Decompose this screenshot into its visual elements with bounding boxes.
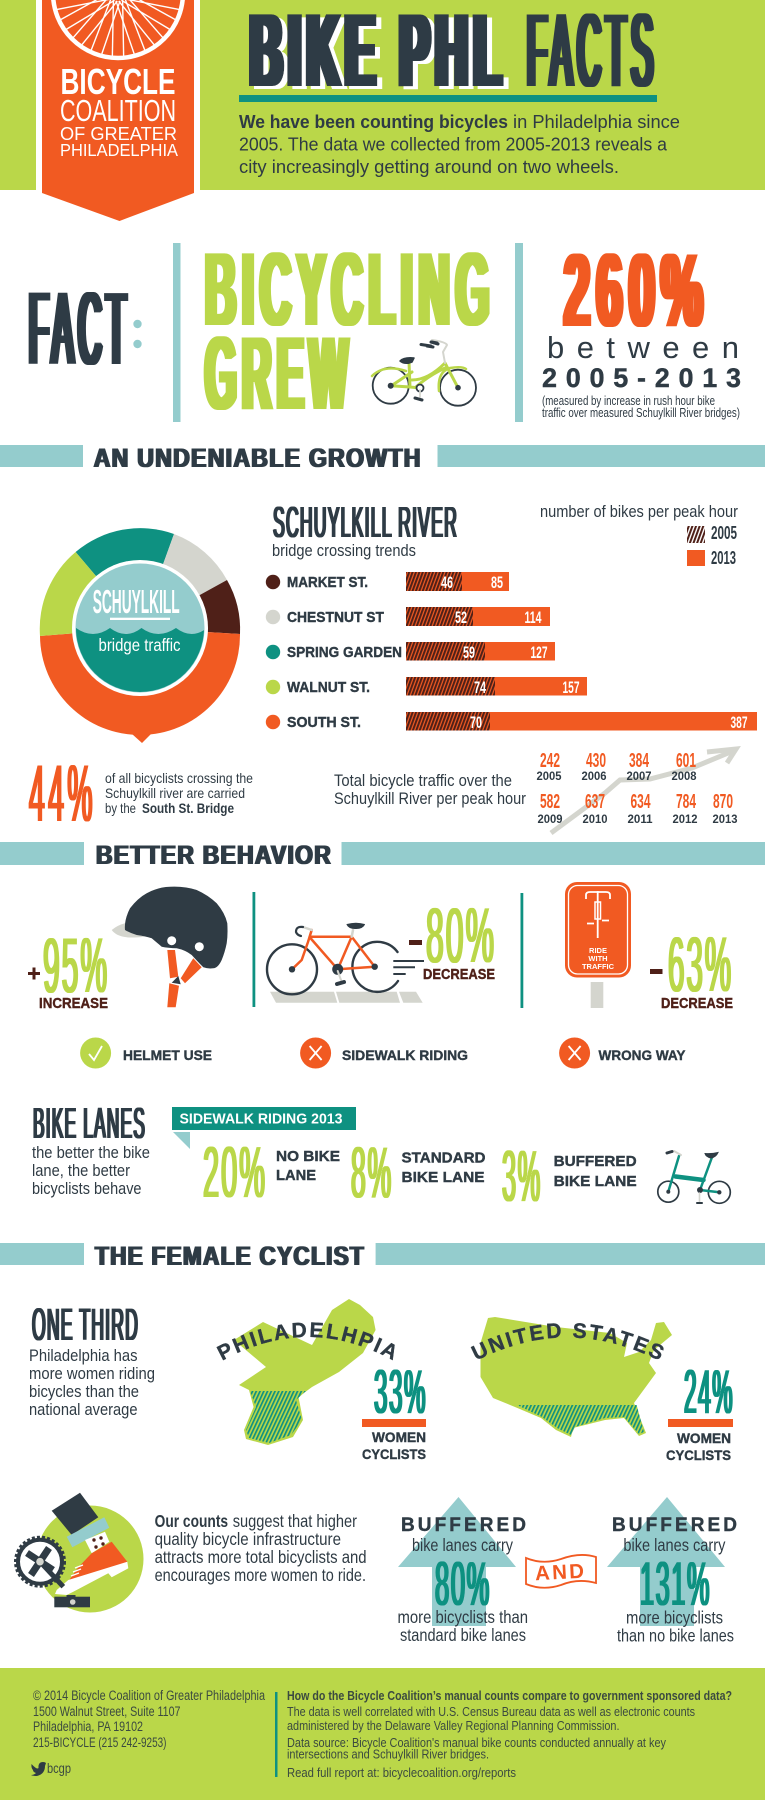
text: 33% xyxy=(374,1358,427,1427)
icon: check helmet use xyxy=(80,1038,212,1068)
yearly totals: 2007 xyxy=(626,771,652,783)
stat: no bike lane: NO BIKE xyxy=(276,1148,340,1165)
row: South St. xyxy=(266,712,757,732)
row: Spring Garden: 59 xyxy=(463,643,475,662)
stat: standard bike lane: BIKE LANE xyxy=(402,1169,484,1186)
icon: cross wrong way: WRONG WAY xyxy=(598,1047,686,1063)
stat: 44 percent south st bridge: by the xyxy=(105,800,136,816)
legend xyxy=(540,503,738,568)
stat arrow: 131 percent more bicyclists: bike lanes carry xyxy=(623,1535,726,1555)
one third text block: Philadelphia has xyxy=(29,1346,138,1365)
methodology note: intersections and Schuylkill River bridges. xyxy=(287,1746,489,1762)
section heading: the female cyclist xyxy=(0,1241,765,1271)
row: Market St.: 46 xyxy=(441,573,453,592)
yearly totals: 582 xyxy=(540,791,560,813)
row: Chestnut St xyxy=(266,607,550,627)
icon: cross sidewalk riding: SIDEWALK RIDING xyxy=(342,1047,468,1063)
stat: united states 24 percent women cyclists xyxy=(666,1358,734,1463)
stat: no bike lane: 20% xyxy=(203,1133,267,1213)
yearly totals: 242 xyxy=(540,750,560,772)
methodology note: Read full report at: bicyclecoalition.org/reports xyxy=(287,1765,516,1780)
intro paragraph xyxy=(239,111,680,177)
panel: fact bicycling grew: FACT xyxy=(29,271,131,386)
stat: 63 percent decrease xyxy=(650,920,733,1012)
stat: 44 percent south st bridge: 44% xyxy=(29,749,96,839)
stat: buffered bike lane: BUFFERED xyxy=(554,1153,637,1170)
icon: twitter bird xyxy=(31,1762,46,1776)
one third text block: bicycles than the xyxy=(29,1382,139,1401)
stat: united states 24 percent women cyclists: WOMEN xyxy=(677,1430,731,1446)
row: Walnut St.: WALNUT ST. xyxy=(287,680,370,696)
stat arrow: 131 percent more bicyclists xyxy=(607,1497,737,1646)
sidewalk slabs xyxy=(270,992,423,1003)
section heading: an undeniable growth xyxy=(0,443,765,473)
stat: 260 percent xyxy=(542,233,741,420)
yearly totals: 2009 xyxy=(538,814,562,826)
panel: sidewalk riding xyxy=(267,891,496,1003)
section heading: better behavior xyxy=(0,840,765,870)
icon: pedalling shoe and chainring xyxy=(16,1493,144,1612)
bike lanes intro: the better the bike xyxy=(32,1143,150,1162)
ribbon: sidewalk riding 2013: SIDEWALK RIDING 2013 xyxy=(180,1112,342,1128)
stat: 95 percent increase: INCREASE xyxy=(39,996,108,1012)
yearly totals: 637 xyxy=(585,791,605,813)
bike lanes intro xyxy=(32,1099,150,1198)
one third text block xyxy=(29,1299,155,1419)
stat arrow: 80 percent more bicyclists: 80% xyxy=(435,1550,491,1619)
stat arrow: 80 percent more bicyclists xyxy=(398,1497,528,1645)
stat: philadelphia 33 percent women cyclists: CYCLISTS xyxy=(362,1446,426,1462)
stat: buffered bike lane: 3% xyxy=(502,1137,542,1217)
one third text block: more women riding xyxy=(29,1364,155,1383)
intro paragraph: 2005. The data we collected from 2005-2013 reveals a xyxy=(239,134,668,154)
bar chart: bridge crossings 2005 vs 2013 xyxy=(266,572,757,732)
yearly totals: 384 xyxy=(629,750,650,772)
donut centre label: bridge traffic xyxy=(98,635,181,655)
stat arrow: 80 percent more bicyclists: BUFFERED xyxy=(401,1515,526,1536)
stat: 260 percent: (measured by increase in rush hour bike xyxy=(542,394,715,408)
yearly totals: 2013 xyxy=(712,814,738,826)
arrow: rising trend xyxy=(551,749,736,833)
row: Chestnut St: CHESTNUT ST xyxy=(287,610,384,626)
panel: helmet use xyxy=(28,887,228,1012)
map: united states xyxy=(470,1317,672,1437)
text: SCHUYLKILL RIVER xyxy=(273,498,458,547)
icon: check helmet use: HELMET USE xyxy=(123,1047,212,1063)
stat: 44 percent south st bridge: of all bicyclists crossing the xyxy=(105,770,253,786)
section heading: better behavior: BETTER BEHAVIOR xyxy=(96,840,332,870)
yearly totals xyxy=(536,750,738,826)
section heading: an undeniable growth: AN UNDENIABLE GROWTH xyxy=(94,443,422,473)
panel: bike lanes: BIKE LANES xyxy=(33,1099,146,1148)
row: Chestnut St: 114 xyxy=(524,608,542,627)
stat: 44 percent south st bridge: South St. Bridge xyxy=(142,800,234,816)
row: Spring Garden: SPRING GARDEN xyxy=(287,645,402,661)
yearly totals: 601 xyxy=(676,750,696,772)
bike lanes intro: bicyclists behave xyxy=(32,1179,142,1198)
stat arrow: 131 percent more bicyclists: than no bike lanes xyxy=(617,1626,734,1646)
yearly totals: 2005 xyxy=(536,771,562,783)
headline: bicycling grew: GREW xyxy=(205,316,353,432)
ribbon: and xyxy=(526,1555,596,1588)
row: Walnut St.: 74 xyxy=(474,678,486,697)
intro paragraph: city increasingly getting around on two wheels. xyxy=(239,156,619,177)
map: philadelphia: PHILADELHPIA xyxy=(216,1322,395,1360)
paragraph: our counts xyxy=(155,1511,367,1585)
logo wordmark: PHILADELPHIA xyxy=(60,140,178,160)
stat: 80 percent decrease xyxy=(409,891,496,983)
panel: wrong way riding xyxy=(565,882,733,1012)
methodology note: The data is well correlated with U.S. Census Bureau data as well as electronic counts xyxy=(287,1704,695,1719)
paragraph: our counts: attracts more total bicyclists and xyxy=(155,1547,367,1567)
contact details: Philadelphia, PA 19102 xyxy=(33,1719,143,1734)
behaviour labels row xyxy=(80,1038,686,1068)
panel: footer xyxy=(0,1668,765,1800)
stat arrow: 131 percent more bicyclists: BUFFERED xyxy=(612,1515,737,1536)
paragraph: our counts: Our counts xyxy=(155,1511,228,1531)
icon: teal folding bicycle xyxy=(658,1151,730,1203)
logo banner: Bicycle Coalition of Greater Philadelphia xyxy=(42,0,194,221)
map: united states: UNITED STATES xyxy=(470,1323,664,1360)
logo wordmark: OF GREATER xyxy=(60,124,177,144)
yearly totals: 634 xyxy=(630,791,651,813)
stat: buffered bike lane: BIKE LANE xyxy=(554,1173,637,1190)
stat: 260 percent: between xyxy=(547,330,739,365)
map: philadelphia xyxy=(216,1299,395,1445)
contact details: 1500 Walnut Street, Suite 1107 xyxy=(33,1704,180,1719)
stat: philadelphia 33 percent women cyclists xyxy=(362,1358,427,1462)
yearly totals: 2006 xyxy=(582,771,606,783)
bike lanes intro: lane, the better xyxy=(32,1161,130,1180)
icon: green cruiser bicycle xyxy=(372,340,476,406)
logo wordmark: COALITION xyxy=(60,93,176,128)
stat arrow: 80 percent more bicyclists: bike lanes carry xyxy=(412,1535,513,1555)
yearly totals: 870 xyxy=(713,791,733,813)
icon: helmet xyxy=(112,887,228,1007)
stat: united states 24 percent women cyclists: CYCLISTS xyxy=(666,1447,731,1463)
row: Walnut St.: 157 xyxy=(562,678,580,697)
row: South St.: 387 xyxy=(730,713,748,732)
headline: bicycling grew xyxy=(205,232,495,432)
logo wordmark: BICYCLE xyxy=(60,61,176,102)
icon: ride with traffic sign: TRAFFIC xyxy=(582,962,615,971)
contact details: © 2014 Bicycle Coalition of Greater Philadelphia xyxy=(33,1688,265,1703)
stat: standard bike lane: STANDARD xyxy=(402,1150,486,1166)
legend: number of bikes per peak hour xyxy=(540,503,738,521)
paragraph: our counts: suggest that higher xyxy=(233,1511,357,1531)
text: ONE THIRD xyxy=(32,1299,139,1350)
stat: 80 percent decrease: DECREASE xyxy=(423,967,495,983)
contact details xyxy=(31,1688,265,1776)
icon: ride with traffic sign xyxy=(565,882,631,1008)
icon: ride with traffic sign: WITH xyxy=(588,954,608,963)
yearly totals: 2012 xyxy=(672,814,698,826)
paragraph: our counts: quality bicycle infrastructure xyxy=(155,1529,341,1549)
yearly totals: 430 xyxy=(586,750,606,772)
ribbon: and: AND xyxy=(534,1560,585,1585)
row: South St.: SOUTH ST. xyxy=(287,715,361,731)
intro paragraph: We have been counting bicycles xyxy=(239,111,508,132)
one third text block: national average xyxy=(29,1400,138,1419)
speed lines xyxy=(393,961,424,974)
row: Spring Garden: 127 xyxy=(530,643,548,662)
panel: helmet use: 95% xyxy=(43,921,109,1009)
methodology note: administered by the Delaware Valley Regional Planning Commission. xyxy=(287,1718,620,1733)
row: Market St.: MARKET ST. xyxy=(287,575,368,591)
yearly totals: 2011 xyxy=(628,814,653,826)
stat: 63 percent decrease: DECREASE xyxy=(661,996,733,1012)
stat: philadelphia 33 percent women cyclists: WOMEN xyxy=(372,1429,426,1445)
stat arrow: 80 percent more bicyclists: standard bike lanes xyxy=(400,1625,526,1645)
row: Walnut St. xyxy=(266,677,587,697)
icon: cross sidewalk riding xyxy=(300,1038,468,1068)
total bicycle traffic trend: Schuylkill River per peak hour xyxy=(334,789,526,808)
yearly totals: 784 xyxy=(676,791,697,813)
legend: 2005 xyxy=(711,523,737,543)
stat: 260 percent: 2005-2013 xyxy=(542,363,741,393)
chart heading: schuylkill river xyxy=(272,498,458,560)
legend: 2013 xyxy=(711,548,736,568)
stat: 95 percent increase xyxy=(28,921,109,1012)
donut centre label xyxy=(93,583,181,655)
yearly totals: 2010 xyxy=(582,814,608,826)
methodology note xyxy=(287,1688,732,1780)
contact details: bcgp xyxy=(47,1761,71,1776)
intro paragraph: in Philadelphia since xyxy=(513,111,680,132)
ribbon: sidewalk riding 2013 xyxy=(172,1107,356,1149)
chart: schuylkill bridge traffic donut xyxy=(40,528,240,743)
row: Market St.: 85 xyxy=(491,573,503,592)
FACT heading xyxy=(29,271,142,386)
chart: schuylkill bridge traffic donut: SCHUYLKILL xyxy=(93,583,180,620)
panel: fact bicycling grew xyxy=(29,232,741,432)
stat: 44 percent south st bridge: Schuylkill river are carried xyxy=(105,785,245,801)
panel: bike lanes xyxy=(32,1099,730,1217)
total bicycle traffic trend xyxy=(334,749,738,833)
contact details: 215-BICYCLE (215 242-9253) xyxy=(33,1735,166,1750)
row: South St.: 70 xyxy=(470,713,482,732)
icon: orange road bicycle xyxy=(267,923,398,994)
stat arrow: 80 percent more bicyclists: more bicyclists than xyxy=(398,1607,528,1627)
stat arrow: 131 percent more bicyclists: more bicyclists xyxy=(626,1608,723,1628)
chart heading: schuylkill river: bridge crossing trends xyxy=(272,541,416,560)
row: Spring Garden xyxy=(266,642,555,662)
total bicycle traffic trend: Total bicycle traffic over the xyxy=(334,771,512,790)
yearly totals: 2008 xyxy=(672,771,697,783)
paragraph: our counts: encourages more women to ride. xyxy=(155,1565,366,1585)
panel: page header xyxy=(0,0,765,221)
row: Market St. xyxy=(266,572,509,592)
icon: bicycle wheel xyxy=(53,0,183,58)
text: 80% xyxy=(426,891,496,979)
stat: no bike lane: LANE xyxy=(276,1167,316,1184)
section heading: the female cyclist: THE FEMALE CYCLIST xyxy=(95,1241,365,1271)
methodology note: Data source: Bicycle Coalition's manual bike counts conducted annually at key xyxy=(287,1735,666,1750)
icon: cross wrong way xyxy=(559,1038,686,1068)
row: Chestnut St: 52 xyxy=(455,608,467,627)
icon: ride with traffic sign: RIDE xyxy=(589,946,607,955)
stat: standard bike lane: 8% xyxy=(351,1134,393,1214)
logo wordmark xyxy=(60,61,178,160)
